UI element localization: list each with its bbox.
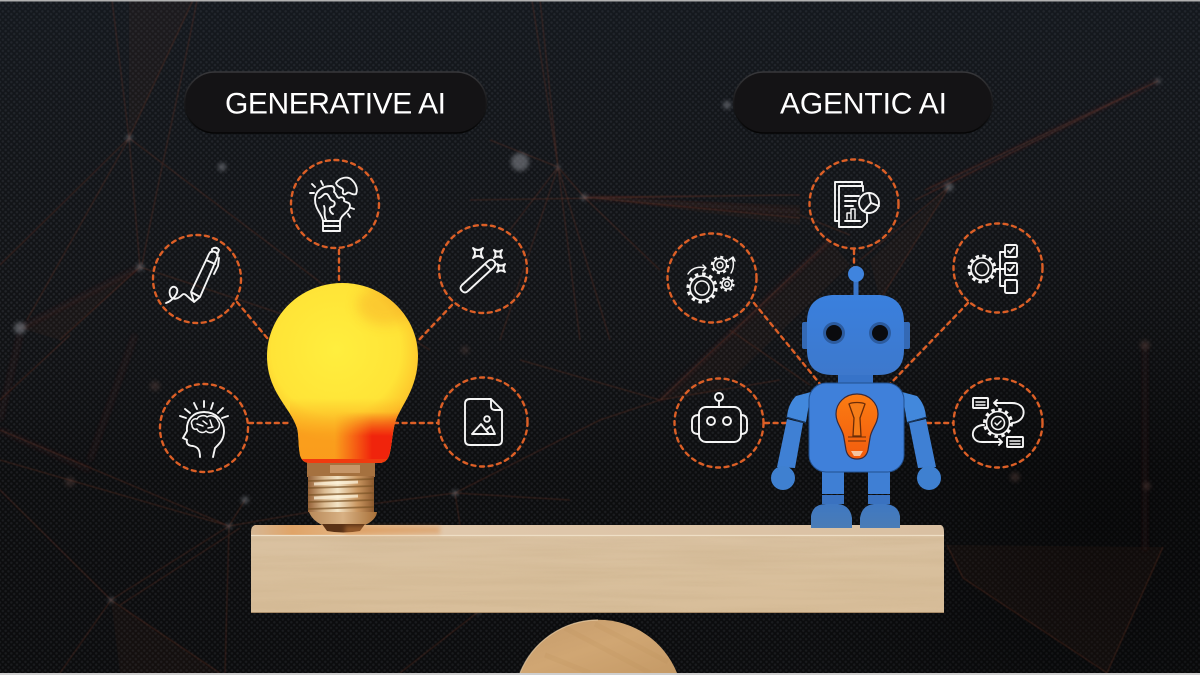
connectors: generative side [237,250,452,423]
icon: magic wand [439,225,527,313]
pill label: Agentic AI [734,72,992,133]
glow on beam under bulb [345,526,440,534]
connectors: agentic side [754,250,968,423]
robot head [807,295,904,375]
icon: report document [810,160,898,248]
robot torso [809,383,904,472]
icon: pen signature [153,235,241,323]
robot chest bulb [836,394,878,459]
bulb glass [267,283,418,463]
robot ears [802,322,910,349]
bulb screw base [307,463,377,532]
icon: puzzle light bulb [291,160,379,248]
top edge strip [0,0,1200,2]
wooden beam [251,525,944,613]
bottom edge strip [0,673,1200,675]
icon: image file [438,378,528,466]
robot eyes [823,322,891,344]
icon: brain head [160,384,248,472]
robot [771,266,941,528]
fulcrum: wooden half disc [520,619,677,673]
pill label: Generative AI [184,72,486,133]
robot arms [771,392,941,490]
icon: gear workflow cycle [954,378,1042,468]
icon: robot head [674,378,764,468]
icon: gears [668,234,756,322]
pill label: Generative AI: GENERATIVE AI [225,88,446,120]
robot antenna [848,266,864,296]
robot legs and feet [811,472,900,528]
light bulb [260,280,440,534]
icon: gear checklist [954,224,1042,312]
pill label: Agentic AI: AGENTIC AI [780,88,947,120]
robot neck [838,375,873,384]
